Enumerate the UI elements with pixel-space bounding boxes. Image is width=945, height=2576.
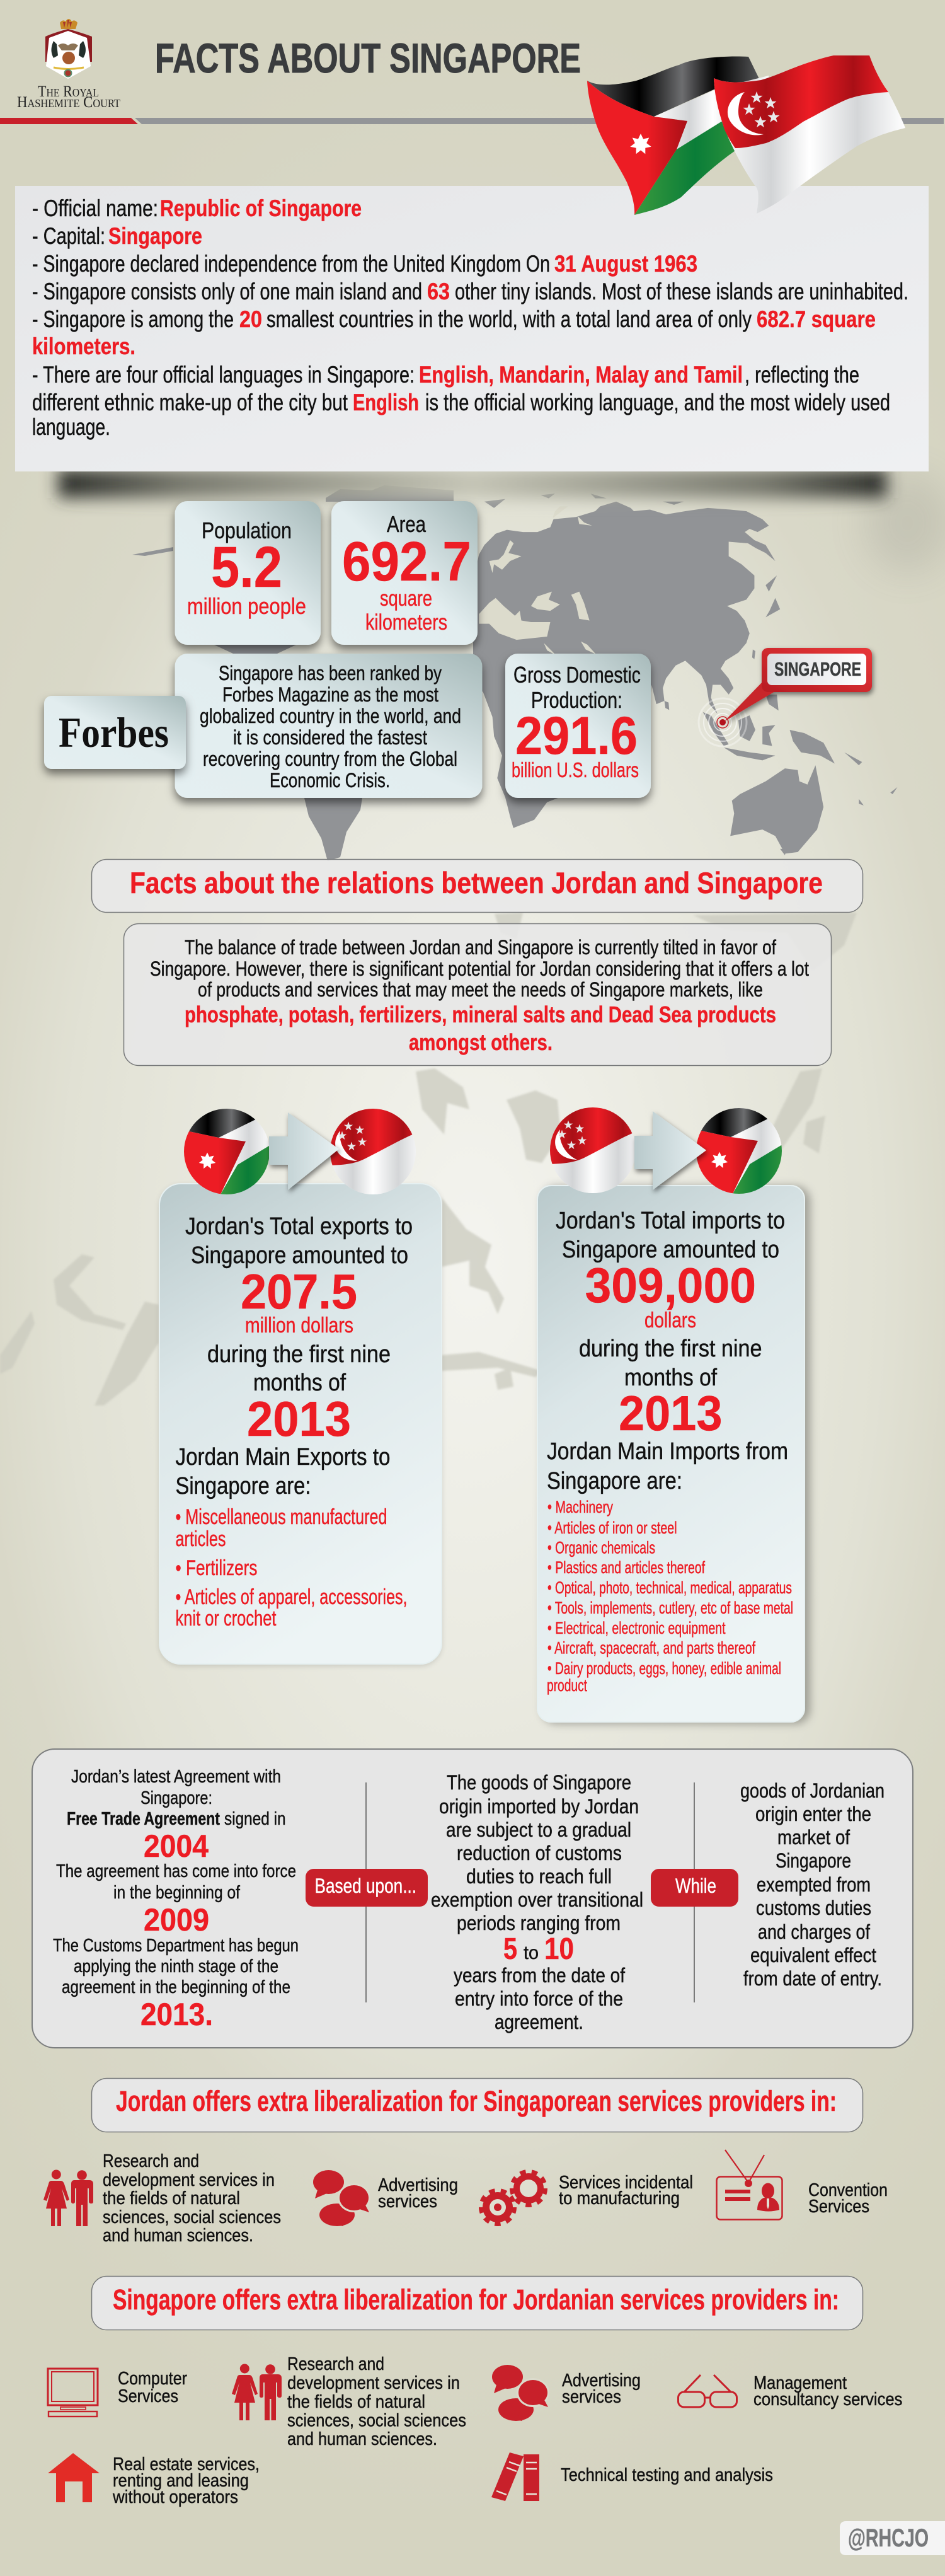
panel: Jordan imports: Singapore are:: [547, 1468, 682, 1494]
export list: articles: [175, 1527, 226, 1551]
button: while: While: [675, 1874, 716, 1897]
facts text: - Official name:: [32, 195, 158, 221]
service: incidental to manufacturing: [481, 2172, 693, 2224]
header logo: The Royal Hashemite Court: [17, 19, 120, 111]
service: technical testing: [491, 2452, 773, 2501]
agreement timeline text: [53, 1767, 299, 2032]
icon: house: [48, 2453, 100, 2502]
facts text: smallest countries in the world, with a total land area of only: [266, 306, 752, 332]
panel: gross domestic production: Production:: [531, 687, 622, 713]
panel: Forbes ranking: Forbes Magazine as the most: [222, 683, 438, 706]
service: real estate: renting and leasing: [113, 2471, 249, 2491]
Jordan flag: [587, 57, 772, 215]
panel: population: million people: [187, 593, 306, 619]
panel: Jordan exports: months of: [253, 1370, 346, 1396]
service: computer: Services: [118, 2386, 178, 2406]
panel: gross domestic production: [505, 654, 651, 798]
service: advertising: [313, 2170, 458, 2226]
button: based upon: [306, 1869, 428, 1907]
export list: • Articles of apparel, accessories,: [175, 1585, 407, 1609]
icon: export flags and arrow: [176, 1101, 423, 1202]
logo text: The Royal: [38, 83, 99, 100]
panel: gross domestic production: billion U.S. dollars: [512, 758, 639, 782]
facts text: 31 August 1963: [554, 251, 697, 277]
export list: • Miscellaneous manufactured: [175, 1505, 387, 1529]
export list: [175, 1505, 407, 1631]
service: research and development: development services in: [103, 2170, 275, 2190]
Singapore goods text: periods ranging from: [457, 1912, 621, 1934]
panel: Jordan imports: Jordan Main Imports from: [547, 1438, 788, 1465]
Singapore goods text: duties to reach full: [466, 1865, 612, 1888]
facts text: language.: [32, 414, 110, 440]
Jordanian goods text: and charges of: [758, 1920, 870, 1943]
callout: Singapore: [724, 648, 872, 722]
service: management consultancy: [678, 2373, 902, 2410]
panel: Jordan imports: dollars: [644, 1308, 696, 1332]
service: management consultancy: consultancy services: [753, 2389, 902, 2410]
panel: balance of trade: Singapore. However, there is significant potential for Jordan considering that it offers a lot: [150, 957, 809, 980]
button: while: [651, 1869, 738, 1907]
panel: gross domestic production: Gross Domestic: [513, 662, 641, 688]
facts text: , reflecting the: [745, 362, 859, 388]
panel: Jordan exports: million dollars: [245, 1314, 353, 1337]
service: research and development: the fields of natural: [103, 2188, 240, 2209]
icon: people: [43, 2169, 93, 2226]
icon: glasses: [678, 2375, 737, 2407]
service: convention: [717, 2150, 888, 2220]
agreement timeline text: in the beginning of: [113, 1883, 241, 1903]
import list: [547, 1498, 793, 1695]
service: advertising (Singapore): Advertising: [562, 2371, 641, 2391]
import list: • Machinery: [547, 1498, 613, 1516]
panel: Forbes logo: [44, 696, 186, 769]
service: research and development (Singapore): the fields of natural: [287, 2392, 425, 2412]
heading: relations between Jordan and Singapore: [92, 860, 863, 913]
Singapore goods text: 5: [503, 1932, 517, 1966]
Singapore goods text: are subject to a gradual: [446, 1818, 631, 1841]
panel: Jordan imports: Jordan's Total imports to: [556, 1208, 785, 1234]
Jordanian goods text: goods of Jordanian: [740, 1779, 885, 1802]
icon: import flags and arrow: [542, 1100, 789, 1201]
agreement timeline text: signed in: [224, 1809, 286, 1829]
faint enlarged world map: [0, 913, 857, 1406]
Jordanian goods text: equivalent effect: [750, 1944, 876, 1967]
panel: Jordan imports: [537, 1186, 805, 1722]
panel: Jordan exports: Singapore are:: [175, 1473, 311, 1499]
title: FACTS ABOUT SINGAPORE: [155, 35, 581, 81]
service: research and development (Singapore): development services in: [287, 2373, 460, 2393]
Singapore goods text: to: [524, 1943, 539, 1963]
Singapore goods text: exemption over transitional: [431, 1888, 643, 1911]
Singapore goods text: The goods of Singapore: [447, 1771, 631, 1794]
agreement timeline text: The Customs Department has begun: [53, 1936, 299, 1956]
panel: Forbes ranking: globalized country in the world, and: [200, 705, 461, 727]
panel: balance of trade: [123, 924, 832, 1065]
panel: Jordan exports: Singapore amounted to: [191, 1242, 408, 1269]
import list: • Optical, photo, technical, medical, apparatus: [547, 1578, 792, 1597]
icon: books: [491, 2452, 539, 2501]
panel: Jordan exports: Jordan Main Exports to: [175, 1444, 391, 1470]
panel: Jordan imports: months of: [624, 1365, 717, 1391]
facts text: kilometers.: [32, 333, 135, 359]
panel: area: [331, 501, 478, 645]
import list: • Dairy products, eggs, honey, edible animal: [547, 1659, 781, 1678]
facts text: English: [353, 390, 419, 415]
logo text: Hashemite Court: [17, 94, 120, 111]
Singapore goods text: years from the date of: [454, 1964, 625, 1987]
service: advertising: Advertising: [378, 2175, 458, 2195]
panel: Forbes ranking: Singapore has been ranked by: [219, 662, 442, 684]
service: research and development: and human sciences.: [103, 2226, 253, 2246]
agreement timeline text: 2009: [144, 1902, 209, 1938]
panel: Forbes ranking: it is considered the fastest: [233, 726, 427, 749]
service: research and development (Singapore): and human sciences.: [287, 2429, 437, 2449]
Jordanian goods text: customs duties: [756, 1897, 871, 1919]
button: based upon: Based upon...: [315, 1874, 416, 1897]
panel: Jordan imports: during the first nine: [579, 1336, 762, 1362]
header rule: [0, 118, 944, 124]
service: research and development: sciences, social sciences: [103, 2207, 281, 2227]
agreement timeline text: agreement in the beginning of the: [62, 1977, 290, 1997]
heading: Jordan offers extra liberalization: [92, 2079, 863, 2132]
icon: gears: [481, 2172, 546, 2224]
Jordanian goods text: Singapore: [776, 1849, 851, 1872]
facts text: English, Mandarin, Malay and Tamil: [419, 362, 743, 388]
panel: Forbes ranking: recovering country from the Global: [203, 748, 457, 770]
agreement timeline text: Free Trade Agreement: [67, 1809, 220, 1829]
panel: Forbes ranking: [175, 654, 483, 798]
icon: waving flags of Jordan and Singapore: [587, 55, 905, 215]
service: convention: Convention: [808, 2180, 888, 2200]
import list: • Electrical, electronic equipment: [547, 1619, 726, 1637]
panel: country facts: [15, 186, 929, 471]
Singapore goods text: origin imported by Jordan: [439, 1795, 639, 1818]
panel: gross domestic production: 291.6: [515, 706, 638, 765]
export list: • Fertilizers: [175, 1556, 257, 1580]
agreement timeline text: 2004: [144, 1828, 209, 1864]
facts text: [32, 195, 908, 440]
facts text: different ethnic make-up of the city but: [32, 390, 348, 415]
icon: coat of arms: [45, 19, 92, 79]
panel: population: [175, 501, 321, 645]
panel shadow: [58, 469, 945, 574]
service: research and development: [43, 2151, 281, 2246]
facts text: 682.7 square: [757, 306, 876, 332]
agreement timeline text: 2013.: [140, 1997, 213, 2032]
service: research and development (Singapore): [232, 2354, 466, 2449]
facts text: - Singapore consists only of one main island and: [32, 279, 422, 304]
Jordanian goods text: market of: [777, 1826, 850, 1849]
panel: area: 692.7: [342, 530, 471, 592]
Jordanian goods text: [740, 1779, 885, 1990]
import list: product: [547, 1676, 587, 1695]
facts text: - There are four official languages in Singapore:: [32, 362, 415, 388]
import list: • Tools, implements, cutlery, etc of base metal: [547, 1598, 793, 1617]
panel: population: Population: [202, 517, 292, 543]
facts text: - Singapore declared independence from the United Kingdom On: [32, 251, 550, 277]
service: management consultancy: Management: [753, 2373, 847, 2393]
panel: area: Area: [387, 511, 427, 537]
service: real estate: Real estate services,: [113, 2454, 260, 2475]
service: real estate: [48, 2453, 260, 2507]
agreement timeline text: The agreement has come into force: [56, 1861, 296, 1881]
import list: • Aircraft, spacecraft, and parts thereof: [547, 1639, 755, 1658]
facts text: 63: [427, 279, 450, 304]
panel: trade agreement: [32, 1749, 913, 2048]
icon: people: [232, 2364, 282, 2420]
service: computer: [48, 2369, 187, 2417]
facts text: - Capital:: [32, 223, 105, 249]
panel: area: kilometers: [365, 610, 447, 635]
heading: relations between Jordan and Singapore: Facts about the relations between Jordan and Singapore: [130, 866, 823, 899]
service: incidental to manufacturing: to manufacturing: [559, 2188, 680, 2209]
panel: balance of trade: phosphate, potash, fertilizers, mineral salts and Dead Sea products: [185, 1002, 776, 1027]
panel: Jordan imports: 2013: [619, 1385, 722, 1441]
service: research and development (Singapore): Research and: [287, 2354, 384, 2374]
service: research and development (Singapore): sciences, social sciences: [287, 2410, 466, 2430]
icon: speech bubbles: [313, 2170, 370, 2226]
export list: knit or crochet: [175, 1607, 277, 1631]
panel: Jordan imports: 309,000: [585, 1257, 756, 1313]
panel: Jordan exports: 207.5: [241, 1264, 357, 1319]
panel: balance of trade: of products and services that may meet the needs of Singapore markets, like: [198, 978, 763, 1001]
panel: population: 5.2: [211, 535, 282, 599]
icon: speech bubbles: [492, 2365, 549, 2421]
callout: Singapore: SINGAPORE: [774, 658, 861, 680]
panel: Jordan exports: during the first nine: [207, 1341, 391, 1368]
import list: • Articles of iron or steel: [547, 1518, 677, 1537]
logo text: [17, 83, 120, 111]
panel: area: square: [380, 586, 432, 611]
import list: • Plastics and articles thereof: [547, 1558, 705, 1577]
panel: Forbes logo: Forbes: [59, 708, 169, 756]
facts text: Republic of Singapore: [160, 195, 362, 221]
icon: name badge: [717, 2150, 782, 2220]
facts text: Singapore: [108, 223, 202, 249]
service: advertising: services: [378, 2192, 437, 2212]
heading: Singapore offers extra liberalization: [92, 2277, 863, 2330]
Singapore goods text: [431, 1771, 643, 2033]
Jordanian goods text: origin enter the: [755, 1803, 871, 1825]
Singapore goods text: reduction of customs: [457, 1842, 622, 1864]
service: advertising (Singapore): [492, 2365, 641, 2421]
service: incidental to manufacturing: Services incidental: [559, 2173, 693, 2193]
agreement timeline text: Singapore:: [140, 1788, 212, 1808]
agreement timeline text: Jordan’s latest Agreement with: [71, 1767, 281, 1787]
panel: Forbes ranking: Economic Crisis.: [270, 769, 390, 792]
Jordanian goods text: from date of entry.: [743, 1967, 882, 1990]
panel: balance of trade: amongst others.: [409, 1029, 553, 1055]
service: advertising (Singapore): services: [562, 2387, 621, 2407]
panel: Jordan imports: Singapore amounted to: [562, 1237, 779, 1263]
panel: balance of trade: The balance of trade between Jordan and Singapore is currently tilted in favor of: [185, 936, 776, 959]
agreement timeline text: applying the ninth stage of the: [74, 1956, 278, 1977]
facts text: - Singapore is among the: [32, 306, 234, 332]
service: technical testing: Technical testing and analysis: [561, 2465, 773, 2485]
icon: Singapore location marker: [699, 698, 747, 746]
panel: Jordan exports: Jordan's Total exports to: [185, 1213, 413, 1240]
Singapore goods text: 10: [544, 1932, 574, 1966]
panel: Jordan exports: [159, 1184, 442, 1664]
Singapore flag: [714, 55, 905, 214]
import list: • Organic chemicals: [547, 1538, 655, 1557]
service: real estate: without operators: [112, 2487, 238, 2507]
Singapore goods text: agreement.: [495, 2011, 583, 2033]
service: computer: Computer: [118, 2369, 187, 2389]
icon: computer: [48, 2369, 98, 2417]
panel: Jordan exports: 2013: [247, 1391, 351, 1447]
facts text: 20: [239, 306, 262, 332]
Singapore goods text: entry into force of the: [455, 1987, 623, 2010]
Jordanian goods text: exempted from: [757, 1873, 871, 1896]
world map: [132, 485, 897, 861]
service: research and development: Research and: [103, 2151, 199, 2171]
service: convention: Services: [808, 2197, 869, 2217]
